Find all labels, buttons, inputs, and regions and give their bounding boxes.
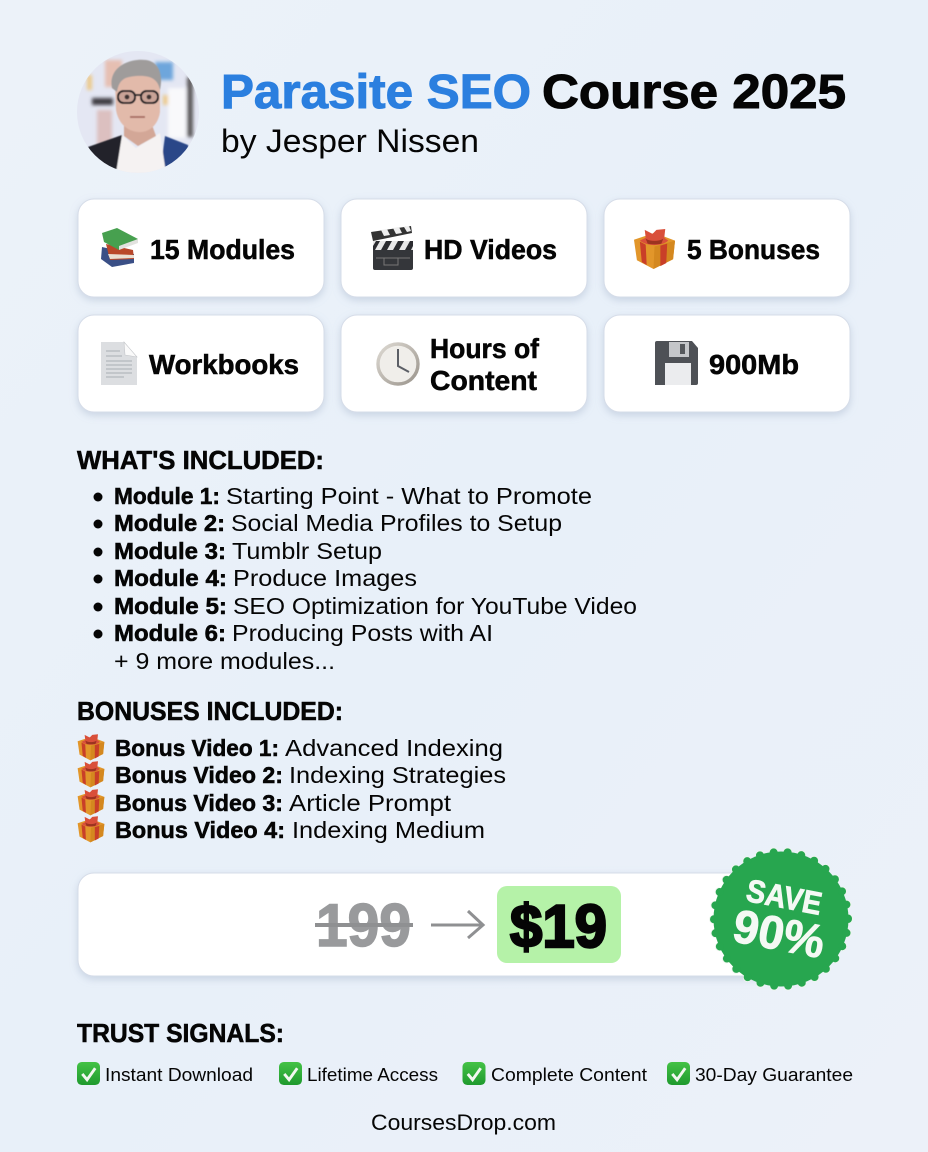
- feature card: Hours of Content: Hours of: [430, 333, 540, 364]
- bonus list: Bonus Video 2:: [115, 762, 283, 788]
- bonus list: Advanced Indexing: [285, 735, 503, 761]
- bonus list: Bonus Video 4:: [115, 817, 285, 843]
- feature card: 900Mb: 900Mb: [709, 349, 799, 380]
- arrow: [431, 911, 483, 938]
- module list: Tumblr Setup: [232, 538, 382, 564]
- feature card: 5 Bonuses: [604, 199, 850, 297]
- module list: Producing Posts with AI: [232, 620, 493, 646]
- icon: clock: [378, 344, 418, 384]
- badge: save 90%: [714, 852, 848, 986]
- module list: SEO Optimization for YouTube Video: [233, 593, 637, 619]
- feature card: 5 Bonuses: 5 Bonuses: [687, 234, 820, 265]
- module list: Produce Images: [233, 565, 417, 591]
- heading: trust signals: TRUST SIGNALS:: [77, 1018, 284, 1048]
- icon: books: [101, 228, 138, 267]
- bonus list: Bonus Video 3:: [115, 790, 283, 816]
- module list: Module 3:: [114, 538, 226, 564]
- feature card: Workbooks: Workbooks: [149, 349, 299, 380]
- trust signals row: Instant Download: [105, 1064, 253, 1085]
- footer: site name: CoursesDrop.com: [371, 1110, 556, 1135]
- module list: [94, 483, 637, 674]
- module list: Module 5:: [114, 593, 227, 619]
- feature card: HD Videos: [341, 199, 587, 297]
- price panel: [78, 873, 808, 976]
- title: Parasite SEO: [221, 66, 531, 119]
- trust signals row: [77, 1062, 853, 1085]
- bonus list: Indexing Strategies: [289, 762, 506, 788]
- icon: gift: [634, 229, 675, 269]
- subtitle: by Jesper Nissen: [221, 123, 479, 159]
- feature card: Hours of Content: Content: [430, 365, 537, 396]
- bonus list: Indexing Medium: [292, 817, 485, 843]
- feature card: 15 Modules: 15 Modules: [150, 234, 295, 265]
- new price: $19: [510, 893, 607, 960]
- heading: what's included: WHAT'S INCLUDED:: [77, 445, 324, 475]
- module list: Module 6:: [114, 620, 226, 646]
- module list: Module 2:: [114, 510, 225, 536]
- badge: save 90%: SAVE: [743, 872, 825, 922]
- feature card: 15 Modules: [78, 199, 324, 297]
- feature card: 900Mb: [604, 315, 850, 412]
- trust signals row: Lifetime Access: [307, 1064, 438, 1085]
- bonus list: [78, 734, 506, 843]
- module list: + 9 more modules...: [114, 648, 335, 674]
- title: [221, 66, 846, 119]
- bonus list: Article Prompt: [289, 790, 452, 816]
- feature card: HD Videos: HD Videos: [424, 234, 557, 265]
- trust signals row: Complete Content: [491, 1064, 647, 1085]
- module list: Starting Point - What to Promote: [226, 483, 592, 509]
- trust signals row: 30-Day Guarantee: [695, 1064, 853, 1085]
- icon: clapperboard: [371, 226, 413, 270]
- module list: Module 4:: [114, 565, 227, 591]
- badge: save 90%: 90%: [729, 899, 829, 968]
- module list: Social Media Profiles to Setup: [231, 510, 562, 536]
- title: Course 2025: [542, 66, 846, 119]
- old price: 199: [316, 892, 411, 959]
- avatar: presenter portrait: [77, 51, 199, 173]
- feature card: Workbooks: [78, 315, 324, 412]
- module list: Module 1:: [114, 483, 220, 509]
- bonus list: Bonus Video 1:: [115, 735, 279, 761]
- icon: document: [101, 342, 137, 385]
- feature card: Hours of Content: [341, 315, 587, 412]
- heading: bonuses included: BONUSES INCLUDED:: [77, 696, 343, 726]
- icon: floppy disk: [655, 341, 698, 385]
